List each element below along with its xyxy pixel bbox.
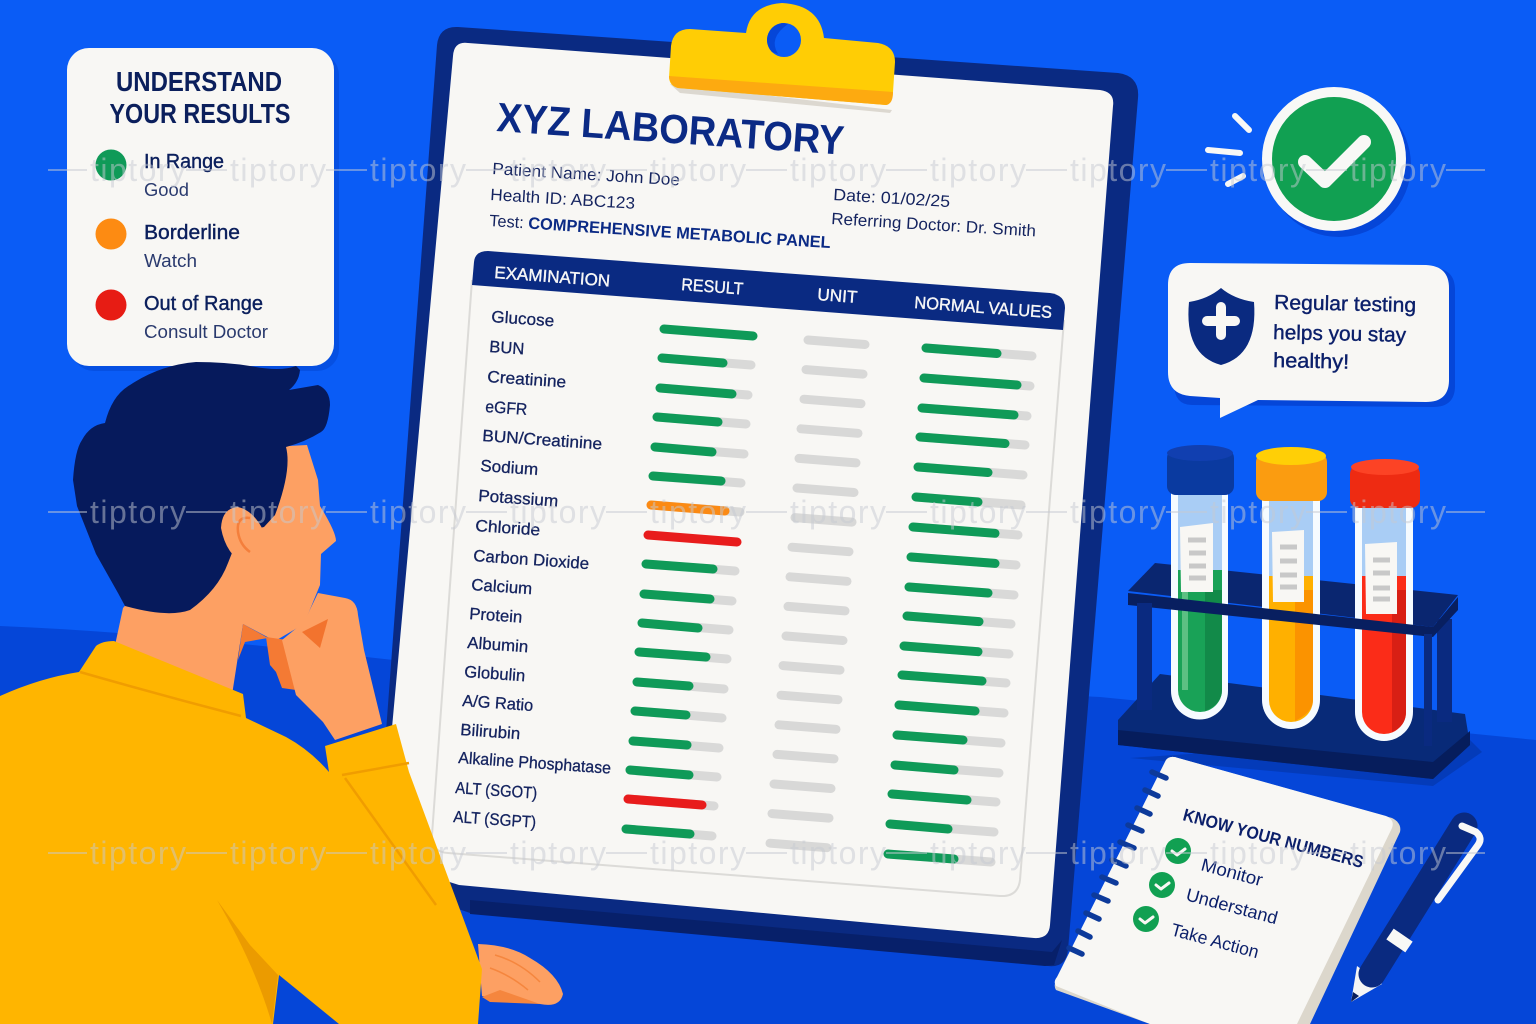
examination names: Glucose [491,308,555,330]
watermark: tiptory [650,152,746,188]
watermark: tiptory [650,835,746,871]
examination names: ALT (SGOT) [455,779,538,803]
legend: in range: In Range [144,151,224,173]
examination names: BUN/Creatinine [482,427,603,453]
icon: shield [1188,288,1254,365]
result bars [626,329,753,836]
watermark: tiptory [1350,494,1446,530]
panel: clipboard [375,3,1138,966]
watermark: tiptory [1070,494,1166,530]
watermark: tiptory [230,494,326,530]
callout text: helps you stay [1273,321,1407,347]
tube: red [1350,459,1420,741]
legend heading: UNDERSTAND [116,66,282,97]
paper sheet [380,43,1113,938]
panel: legend [67,48,339,371]
table header: EXAMINATION [494,263,611,290]
rack top plate [1128,563,1458,627]
table frame [432,280,1064,896]
examination names: Calcium [471,576,533,598]
unit placeholder bars [770,340,865,848]
watermark: tiptory [930,152,1026,188]
patient details: Health ID: ABC123 [490,186,636,213]
patient details: Patient Name: John Doe [492,160,681,189]
ear [221,507,262,565]
table header: NORMAL VALUES [914,293,1053,322]
rack front bar and posts [1128,593,1458,637]
watermark: tiptory [90,835,186,871]
legend: borderline [96,218,240,271]
table header: RESULT [681,275,744,299]
pen [1351,826,1480,1002]
examination names: Alkaline Phosphatase [458,749,612,778]
patient details: Test: COMPREHENSIVE METABOLIC PANEL [489,212,831,252]
watermark: tiptory [370,152,466,188]
test tube rack [1118,445,1482,786]
examination names [453,308,612,832]
clipboard clip [669,3,895,113]
watermark: tiptory [1210,835,1306,871]
legend heading [110,66,290,129]
checklist [1133,838,1280,962]
hair [73,362,330,613]
examination names: ALT (SGPT) [453,808,537,832]
desk surface [0,626,1536,1024]
watermark: tiptory [230,152,326,188]
watermark: tiptory [1070,152,1166,188]
examination names: A/G Ratio [462,692,534,715]
legend: borderline: Borderline [144,222,240,244]
patient details [489,160,1036,252]
neck shadow [238,624,268,660]
examination names: Albumin [467,634,529,656]
normal value bars [888,348,1032,862]
watermark: tiptory [90,494,186,530]
title: XYZ LABORATORY [495,94,846,164]
examination names: Chloride [475,517,541,540]
checklist: Monitor [1199,855,1265,890]
watermark: tiptory [230,835,326,871]
examination names: BUN [489,338,525,358]
icon: green check badge [1208,87,1411,237]
checklist: Take Action [1169,920,1261,962]
rack base shadow [1130,735,1482,786]
watermark: tiptory [1210,494,1306,530]
rack base [1118,674,1470,779]
watermark: tiptory [510,152,606,188]
legend: out of range: Consult Doctor [144,322,268,342]
legend: out of range [96,290,268,342]
hand on desk [478,944,563,1005]
watermark [48,152,1485,871]
table header: UNIT [817,285,858,307]
examination names: Sodium [480,457,539,479]
patient details: Date: 01/02/25 [833,186,951,211]
neck and face [114,445,336,695]
tube: green [1167,445,1234,720]
legend: borderline: Watch [144,251,197,271]
shirt [0,641,482,1024]
notebook [1055,757,1400,1024]
examination names: Potassium [478,487,559,511]
notebook heading: KNOW YOUR NUMBERS [1181,805,1366,872]
watermark: tiptory [90,152,186,188]
patient details: Referring Doctor: Dr. Smith [831,210,1036,241]
watermark: tiptory [370,494,466,530]
examination names: Protein [469,605,523,627]
watermark: tiptory [790,835,886,871]
watermark: tiptory [790,494,886,530]
legend heading: YOUR RESULTS [110,98,290,129]
tube: orange [1256,447,1327,729]
rack rear posts [1437,619,1452,722]
table header [472,251,1065,330]
watermark: tiptory [790,152,886,188]
watermark: tiptory [1350,152,1446,188]
watermark: tiptory [650,494,746,530]
legend: in range: Good [144,180,189,200]
watermark: tiptory [510,494,606,530]
checklist: Understand [1184,885,1280,928]
callout: regular testing [1168,263,1455,418]
legend: out of range: Out of Range [144,293,263,315]
watermark: tiptory [510,835,606,871]
legend: in range [96,150,224,200]
examination names: Globulin [464,663,526,685]
callout text: healthy! [1273,349,1349,374]
watermark: tiptory [1070,835,1166,871]
examination names: Bilirubin [460,721,521,743]
person [0,362,563,1024]
examination names: eGFR [485,398,528,419]
callout text [1273,291,1416,374]
examination names: Creatinine [487,368,567,392]
watermark: tiptory [930,835,1026,871]
hand on chin [282,593,382,740]
callout text: Regular testing [1274,291,1416,317]
watermark: tiptory [370,835,466,871]
notebook rings [1069,772,1166,954]
examination names: Carbon Dioxide [473,547,590,573]
watermark: tiptory [930,494,1026,530]
watermark: tiptory [1210,152,1306,188]
fingers [266,637,296,690]
watermark: tiptory [1350,835,1446,871]
